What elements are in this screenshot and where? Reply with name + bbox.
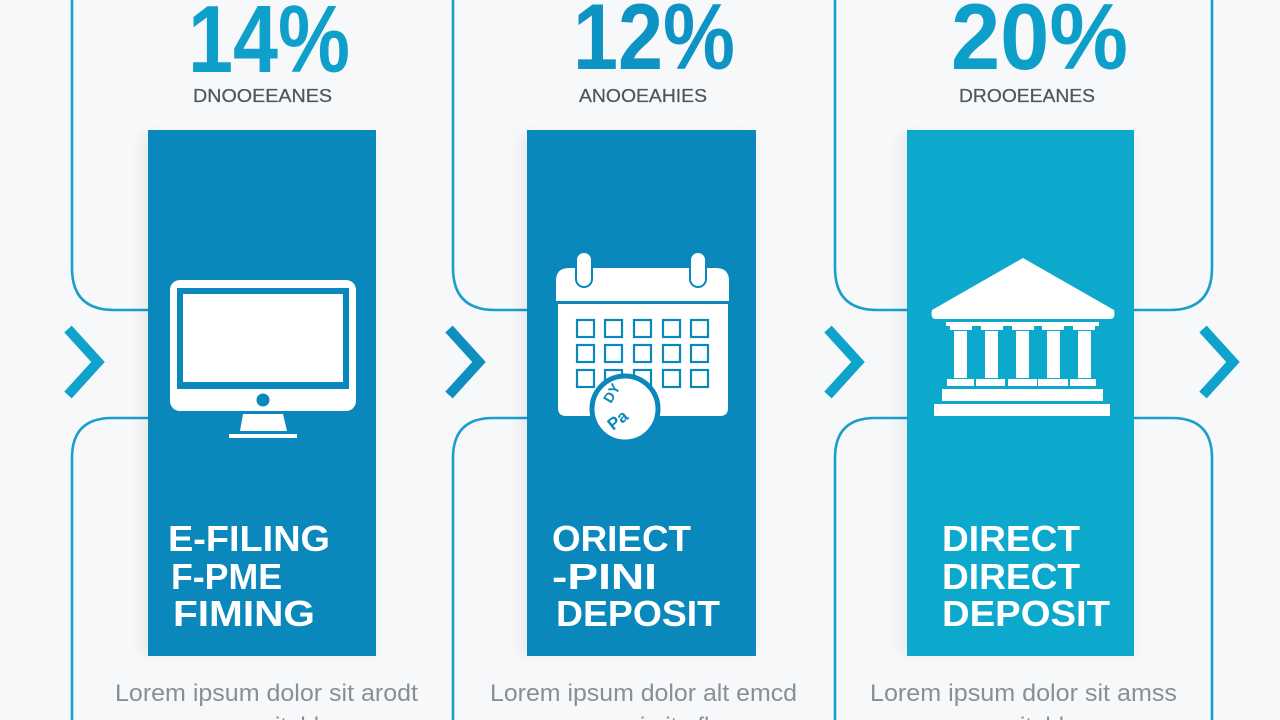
panel: direct deposit (calendar) bbox=[527, 130, 756, 656]
panel: e-filing bbox=[148, 130, 376, 656]
connector lines: column 1 bbox=[72, 0, 150, 720]
arrow 2 bbox=[449, 329, 479, 395]
label column 1: DNOOEEANES bbox=[193, 85, 332, 106]
icon: bank bbox=[932, 258, 1114, 416]
arrow 1 bbox=[68, 329, 98, 395]
panel title: FIMING bbox=[173, 593, 315, 634]
body text column 1: Lorem ipsum dolor sit arodt bbox=[115, 680, 418, 707]
arrow 4 bbox=[1203, 329, 1233, 395]
icon: calendar: DY bbox=[600, 380, 624, 406]
panel title: DIRECT bbox=[942, 556, 1080, 597]
icon: monitor bbox=[170, 280, 356, 438]
panel title: -PINI bbox=[552, 556, 657, 597]
arrow 3 bbox=[828, 329, 858, 395]
body text column 2: Lorem ipsum dolor alt emcd bbox=[490, 680, 797, 707]
panel shadows bbox=[142, 134, 1133, 654]
panel title bbox=[168, 518, 330, 634]
panel title: DEPOSIT bbox=[556, 593, 720, 634]
panel title: F-PME bbox=[171, 556, 282, 597]
body text column 3: Lorem ipsum dolor sit amss bbox=[870, 680, 1177, 707]
label column 2: ANOOEAHIES bbox=[579, 85, 707, 106]
panel title bbox=[942, 518, 1110, 634]
panel title: ORIECT bbox=[552, 518, 691, 559]
label column 3: DROOEEANES bbox=[959, 85, 1095, 106]
icon: calendar: Pa bbox=[604, 406, 632, 434]
panel title: DEPOSIT bbox=[942, 593, 1110, 634]
panel title bbox=[552, 518, 720, 634]
connector lines: column 2 bbox=[453, 0, 529, 720]
icon: calendar bbox=[556, 252, 729, 442]
panel title: DIRECT bbox=[942, 518, 1080, 559]
connector lines: column 3 bbox=[835, 0, 1212, 720]
panel title: E-FILING bbox=[168, 518, 330, 559]
panel: direct deposit (bank) bbox=[907, 130, 1134, 656]
